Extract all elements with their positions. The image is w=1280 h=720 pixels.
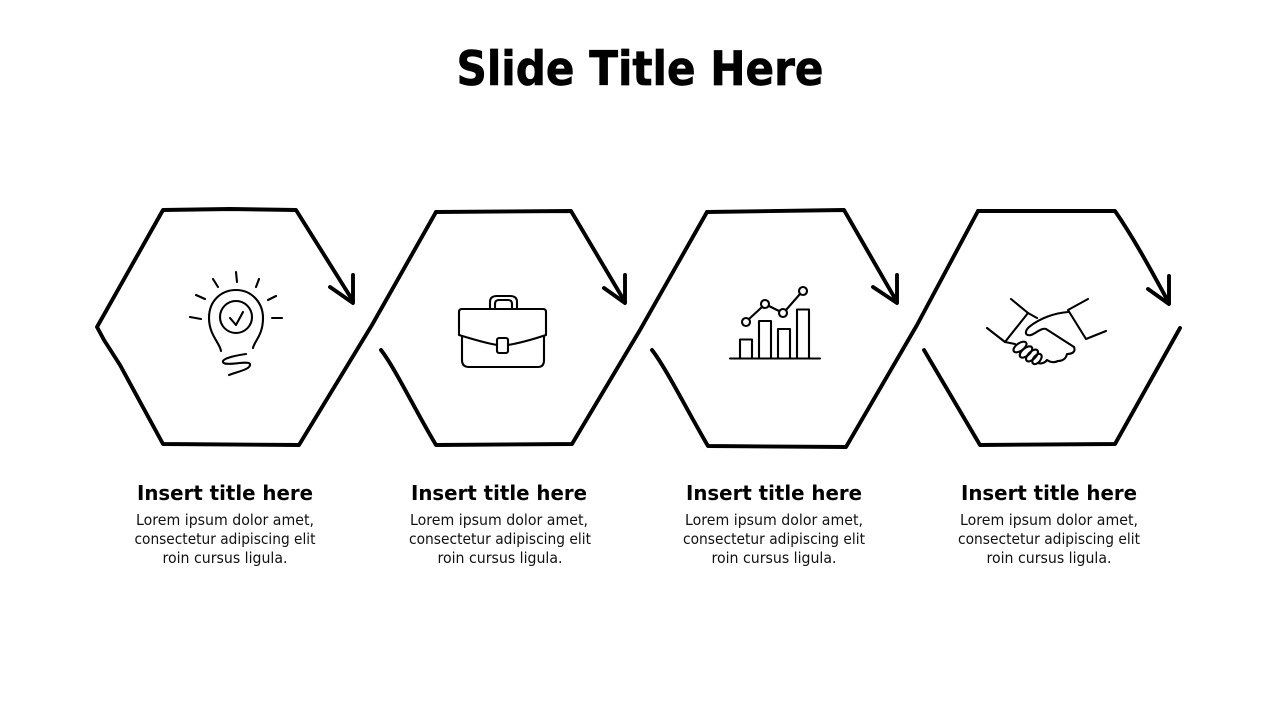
arrowhead 4 xyxy=(1148,276,1169,304)
icon: bar chart with trend line xyxy=(730,287,820,358)
hexagon outline with arrow 3 xyxy=(652,210,978,447)
text block 4: roin cursus ligula. xyxy=(986,549,1112,567)
text block 4: consectetur adipiscing elit xyxy=(958,530,1140,548)
panel: hexagon step 2 xyxy=(381,211,707,567)
panel: hexagon step 3 xyxy=(652,210,978,567)
text block 4: Lorem ipsum dolor amet, xyxy=(960,511,1138,529)
text block 1: consectetur adipiscing elit xyxy=(134,530,316,548)
text block 2: Lorem ipsum dolor amet, xyxy=(410,511,588,529)
text block 1: Insert title here xyxy=(137,481,313,505)
arrowhead 2 xyxy=(604,275,625,303)
text block 2: roin cursus ligula. xyxy=(438,549,562,567)
text block 4 xyxy=(958,481,1140,567)
text block 2 xyxy=(409,481,591,567)
panel: hexagon step 1 xyxy=(97,209,436,567)
text block 2: Insert title here xyxy=(411,481,587,505)
text block 2: consectetur adipiscing elit xyxy=(409,530,591,548)
text block 3: roin cursus ligula. xyxy=(712,549,836,567)
text block 4: Insert title here xyxy=(961,481,1137,505)
text block 3: consectetur adipiscing elit xyxy=(683,530,865,548)
hexagon outline with arrow 1 xyxy=(97,209,436,445)
arrowhead 3 xyxy=(873,275,897,303)
text block 1: Lorem ipsum dolor amet, xyxy=(136,511,314,529)
text block 3: Lorem ipsum dolor amet, xyxy=(685,511,863,529)
icon: handshake xyxy=(987,299,1106,366)
hexagon outline with arrow 4 xyxy=(924,211,1180,445)
title: Slide Title Here xyxy=(456,42,824,97)
text block 3: Insert title here xyxy=(686,481,862,505)
text block 1 xyxy=(134,481,316,567)
arrowhead 1 xyxy=(330,275,353,303)
panel: hexagon step 4 xyxy=(924,211,1180,567)
text block 3 xyxy=(683,481,865,567)
icon: light bulb with check mark xyxy=(190,272,282,375)
text block 1: roin cursus ligula. xyxy=(162,549,288,567)
hexagon outline with arrow 2 xyxy=(381,211,707,445)
icon: briefcase xyxy=(459,296,546,367)
